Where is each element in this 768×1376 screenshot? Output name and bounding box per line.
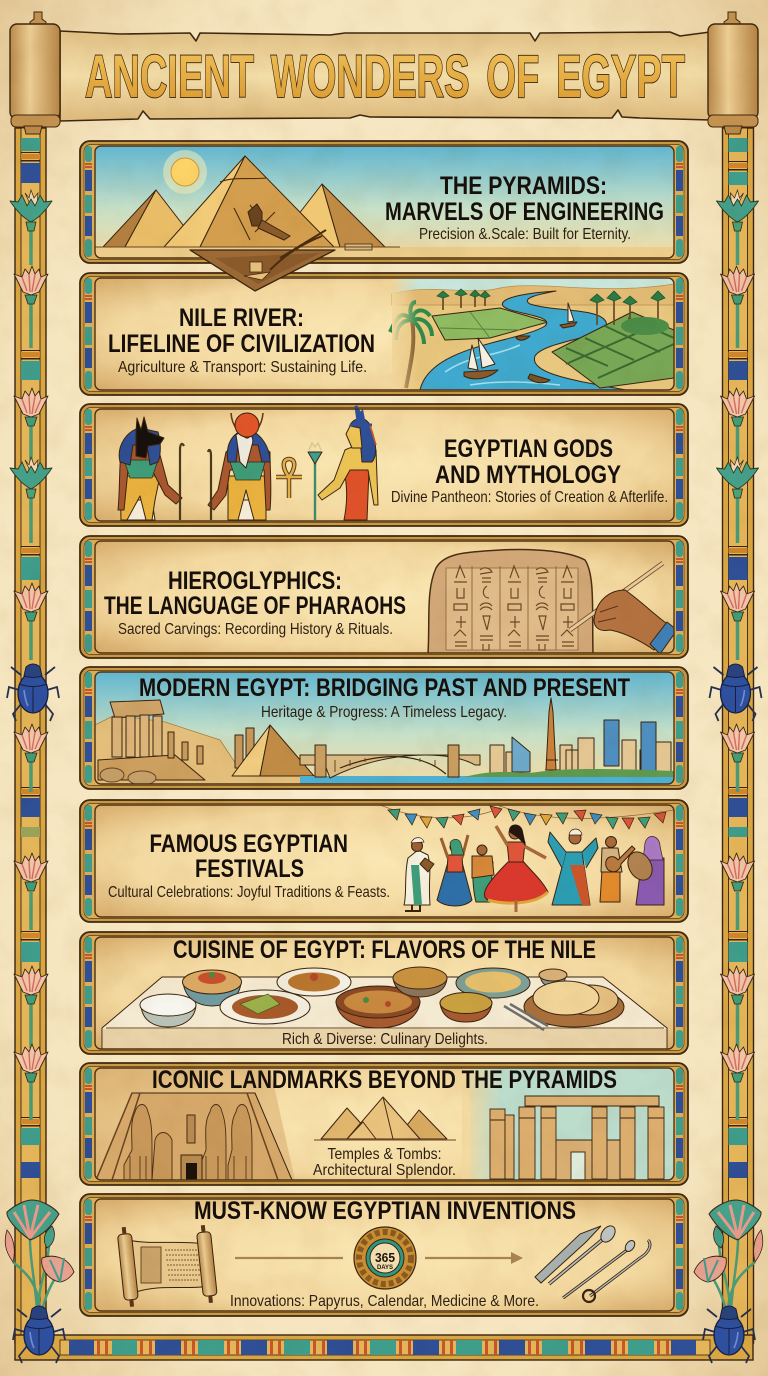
panel: Egyptian Gods	[80, 404, 688, 526]
figure: Anubis	[118, 417, 184, 520]
panel: Nile River	[80, 273, 688, 395]
heading: THE PYRAMIDS:	[440, 172, 607, 200]
bottom decorative border	[15, 1335, 753, 1360]
subheading: Cultural Celebrations: Joyful Traditions & Feasts.	[108, 884, 390, 901]
figure: Isis	[308, 406, 378, 520]
dancers and musicians	[404, 824, 664, 912]
heading	[108, 304, 375, 358]
heading: ICONIC LANDMARKS BEYOND THE PYRAMIDS	[152, 1066, 617, 1094]
heading: MUST-KNOW EGYPTIAN INVENTIONS	[194, 1197, 576, 1225]
city skyline	[464, 698, 674, 777]
hand with reed pen	[570, 563, 677, 654]
heading	[435, 435, 621, 489]
musician orange	[600, 836, 635, 902]
icon: calendar wheel: 365	[375, 1250, 395, 1265]
man blue robe	[548, 829, 598, 905]
bottom-left lotus bouquet and scarab	[5, 1200, 74, 1363]
temple colonnade	[462, 1068, 674, 1180]
sun	[163, 150, 207, 194]
subheading	[313, 1146, 456, 1179]
subheading: Innovations: Papyrus, Calendar, Medicine & More.	[230, 1293, 539, 1310]
left decorative border column	[7, 128, 59, 1343]
panel: Modern Egypt	[80, 667, 688, 789]
Abu Simbel temple	[95, 1068, 295, 1181]
figure: Horus	[208, 413, 271, 520]
subheading: Rich & Diverse: Culinary Delights.	[282, 1031, 488, 1048]
female dancer blue skirt	[437, 835, 472, 906]
heading: FAMOUS EGYPTIAN	[150, 830, 348, 858]
modern Egypt scene	[95, 672, 674, 785]
right decorative border column	[710, 128, 762, 1343]
panel: The Pyramids	[80, 141, 688, 263]
central dancer red skirt	[484, 824, 548, 912]
heading: NILE RIVER:	[179, 304, 304, 332]
heading: MODERN EGYPT: BRIDGING PAST AND PRESENT	[139, 674, 630, 702]
icon: calendar wheel: DAYS	[377, 1265, 393, 1271]
three pyramids	[314, 1097, 456, 1140]
heading	[385, 172, 664, 226]
heading: HIEROGLYPHICS:	[168, 567, 342, 595]
banner sheet	[60, 31, 710, 121]
panel: Cuisine	[80, 932, 688, 1054]
dishes	[140, 967, 624, 1030]
heading: MARVELS OF ENGINEERING	[385, 198, 664, 226]
ruins and desert	[95, 700, 330, 785]
drummer purple	[623, 836, 664, 905]
subheading: Precision &.Scale: Built for Eternity.	[419, 226, 631, 243]
bottom-right lotus bouquet and scarab	[694, 1200, 763, 1363]
panel: Festivals	[80, 800, 688, 922]
icon: calendar wheel	[354, 1227, 416, 1289]
pyramid	[232, 725, 270, 776]
right scroll roller	[708, 12, 758, 134]
title scroll banner	[10, 12, 758, 134]
stone tablet	[428, 549, 593, 654]
arch bridge	[300, 745, 480, 778]
icon: papyrus scroll	[117, 1224, 218, 1307]
table with cloth	[102, 977, 667, 1050]
heading: FESTIVALS	[195, 855, 304, 883]
pyramids scene	[95, 146, 674, 258]
panel: Hieroglyphics	[80, 536, 688, 658]
subheading: Heritage & Progress: A Timeless Legacy.	[261, 704, 507, 721]
heading: CUISINE OF EGYPT: FLAVORS OF THE NILE	[173, 936, 596, 964]
staff	[180, 444, 184, 520]
man green robe	[472, 845, 494, 902]
nile landscape	[390, 278, 674, 390]
subheading: Sacred Carvings: Recording History & Rituals.	[118, 621, 393, 638]
icon: ankh	[276, 459, 302, 498]
arrow	[425, 1252, 523, 1264]
sailboats	[464, 303, 577, 383]
heading	[104, 567, 406, 620]
heading: EGYPTIAN GODS	[444, 435, 613, 463]
heading: THE LANGUAGE OF PHARAOHS	[104, 592, 406, 620]
panel: Iconic Landmarks	[80, 1063, 688, 1185]
heading: LIFELINE OF CIVILIZATION	[108, 330, 375, 358]
icon: medical tools	[535, 1223, 650, 1302]
heading	[150, 830, 348, 883]
subheading: Agriculture & Transport: Sustaining Life.	[118, 359, 367, 376]
subheading: Architectural Splendor.	[313, 1162, 456, 1179]
arrow line left	[235, 1257, 343, 1259]
palm trees	[390, 289, 669, 388]
heading: AND MYTHOLOGY	[435, 461, 621, 489]
panel: Inventions	[80, 1194, 688, 1316]
violinist	[404, 838, 434, 911]
left scroll roller	[10, 12, 60, 134]
sun disk with horns	[231, 413, 263, 438]
subheading: Divine Pantheon: Stories of Creation & Afterlife.	[391, 489, 668, 506]
subheading: Temples & Tombs:	[328, 1146, 442, 1163]
icon: pyramid cross-section	[190, 230, 335, 291]
bunting flags	[380, 805, 674, 829]
